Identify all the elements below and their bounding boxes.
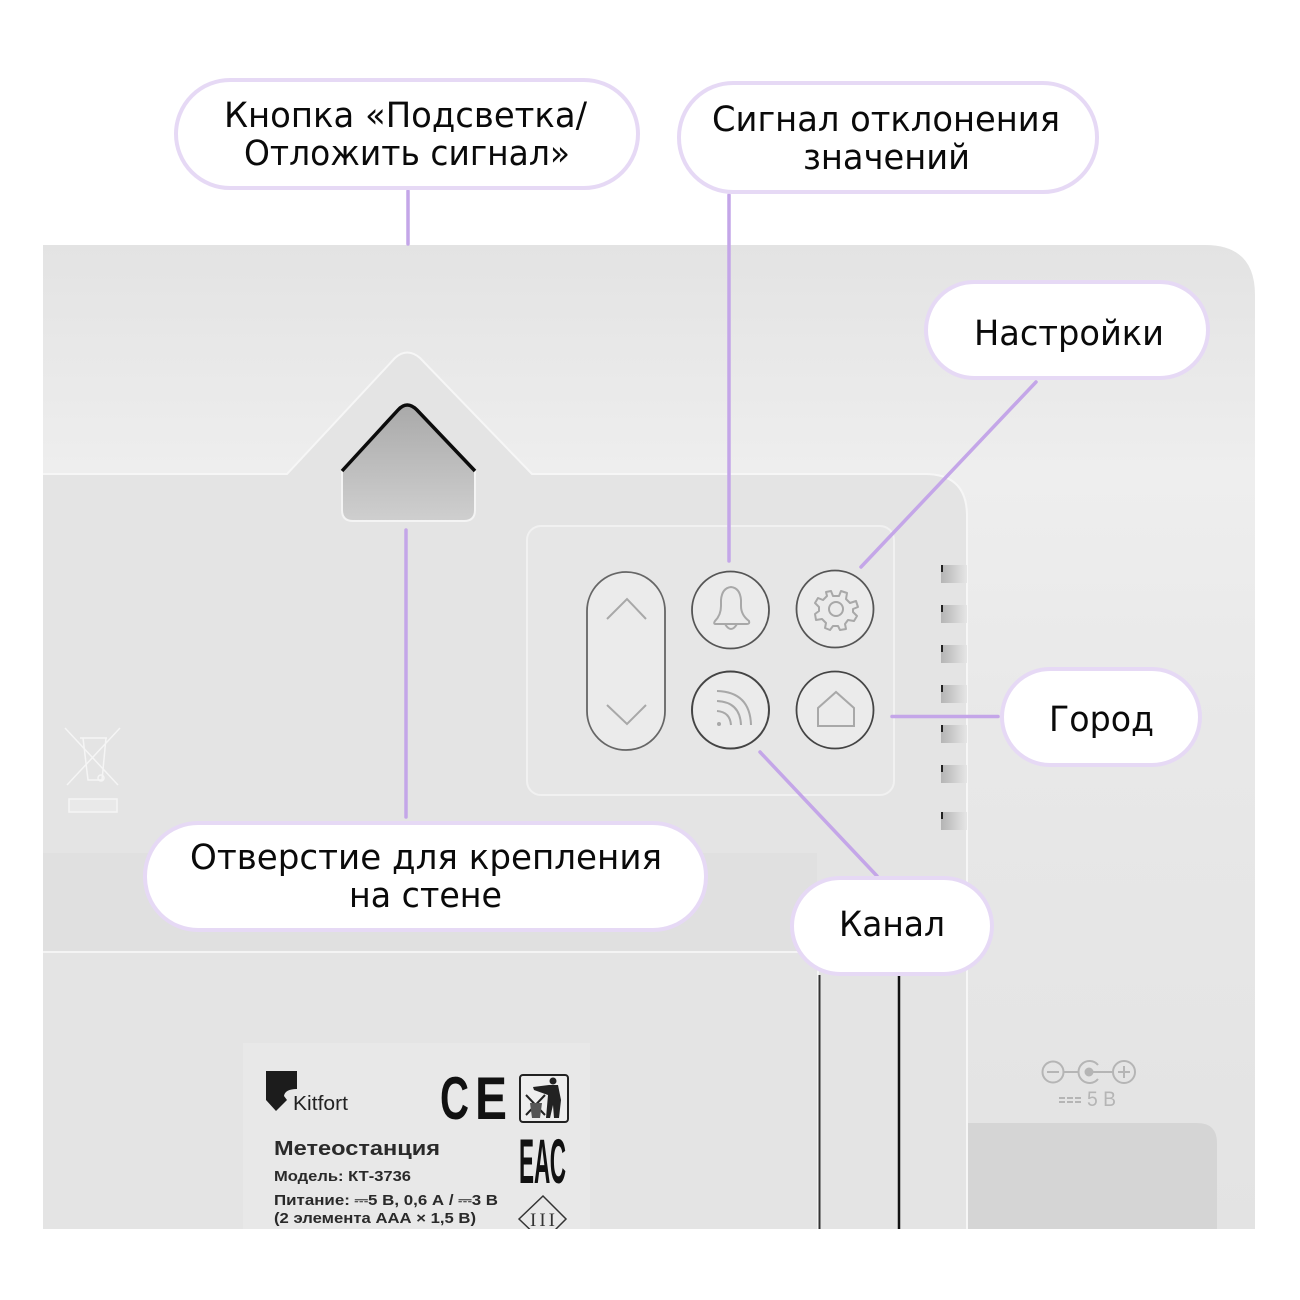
button: up and down — [587, 572, 665, 750]
callout: settings: Настройки — [974, 314, 1164, 354]
icon: disposal pictogram — [520, 1075, 568, 1122]
callout: backlight / snooze button: Отложить сигнал» — [244, 134, 570, 174]
button: bell — [692, 572, 769, 648]
icon: Kitfort logo — [266, 1071, 297, 1111]
callout: city: Город — [1049, 700, 1154, 740]
icon: crossed-out recycling bin — [65, 728, 120, 812]
power specification: Питание: ⎓5 В, 0,6 А / ⎓3 В — [274, 1192, 498, 1209]
product label sticker: ЕАС — [519, 1127, 566, 1197]
class III mark: III — [530, 1210, 555, 1231]
seam lines — [818, 975, 820, 1229]
ventilation slots — [941, 565, 967, 830]
callout: wall mount hole: на стене — [349, 876, 502, 916]
model number: Модель: КТ-3736 — [274, 1168, 411, 1185]
callout: backlight / snooze button: Кнопка «Подсветка/ — [224, 96, 587, 136]
callout: city — [1002, 669, 1200, 765]
device back panel — [43, 245, 1255, 1229]
wall mount hole — [342, 404, 475, 521]
brand name: Kitfort — [293, 1093, 348, 1115]
CE mark: Е — [475, 1065, 507, 1132]
callout: channel — [792, 878, 992, 974]
CE mark — [440, 1065, 507, 1132]
voltage marking: 5 В — [1087, 1088, 1116, 1111]
button: gear — [796, 570, 874, 648]
callout: deviation alarm: значений — [803, 138, 970, 178]
CE mark: C — [440, 1065, 469, 1132]
button panel — [527, 526, 894, 795]
product label sticker — [243, 1043, 590, 1242]
callout: deviation alarm: Сигнал отклонения — [712, 100, 1060, 140]
callout: deviation alarm — [679, 83, 1097, 192]
model title: Метеостанция — [274, 1138, 440, 1160]
callout: settings — [926, 282, 1208, 378]
power connector recess — [968, 1123, 1217, 1229]
lower recess band — [43, 853, 817, 951]
callout: wall mount hole: Отверстие для крепления — [190, 838, 662, 878]
button: home — [796, 672, 874, 748]
callout: channel: Канал — [839, 905, 945, 945]
power connector marking — [1042, 1061, 1135, 1111]
battery specification: (2 элемента ААА × 1,5 В) — [274, 1210, 476, 1227]
white margin below device — [0, 1229, 1300, 1300]
callout: wall mount hole — [145, 823, 706, 930]
raised inner cover — [43, 352, 967, 1229]
connector lines — [406, 191, 1036, 876]
callout: backlight / snooze button — [176, 80, 638, 188]
button: signal channel — [692, 672, 769, 748]
class III mark — [519, 1196, 566, 1242]
